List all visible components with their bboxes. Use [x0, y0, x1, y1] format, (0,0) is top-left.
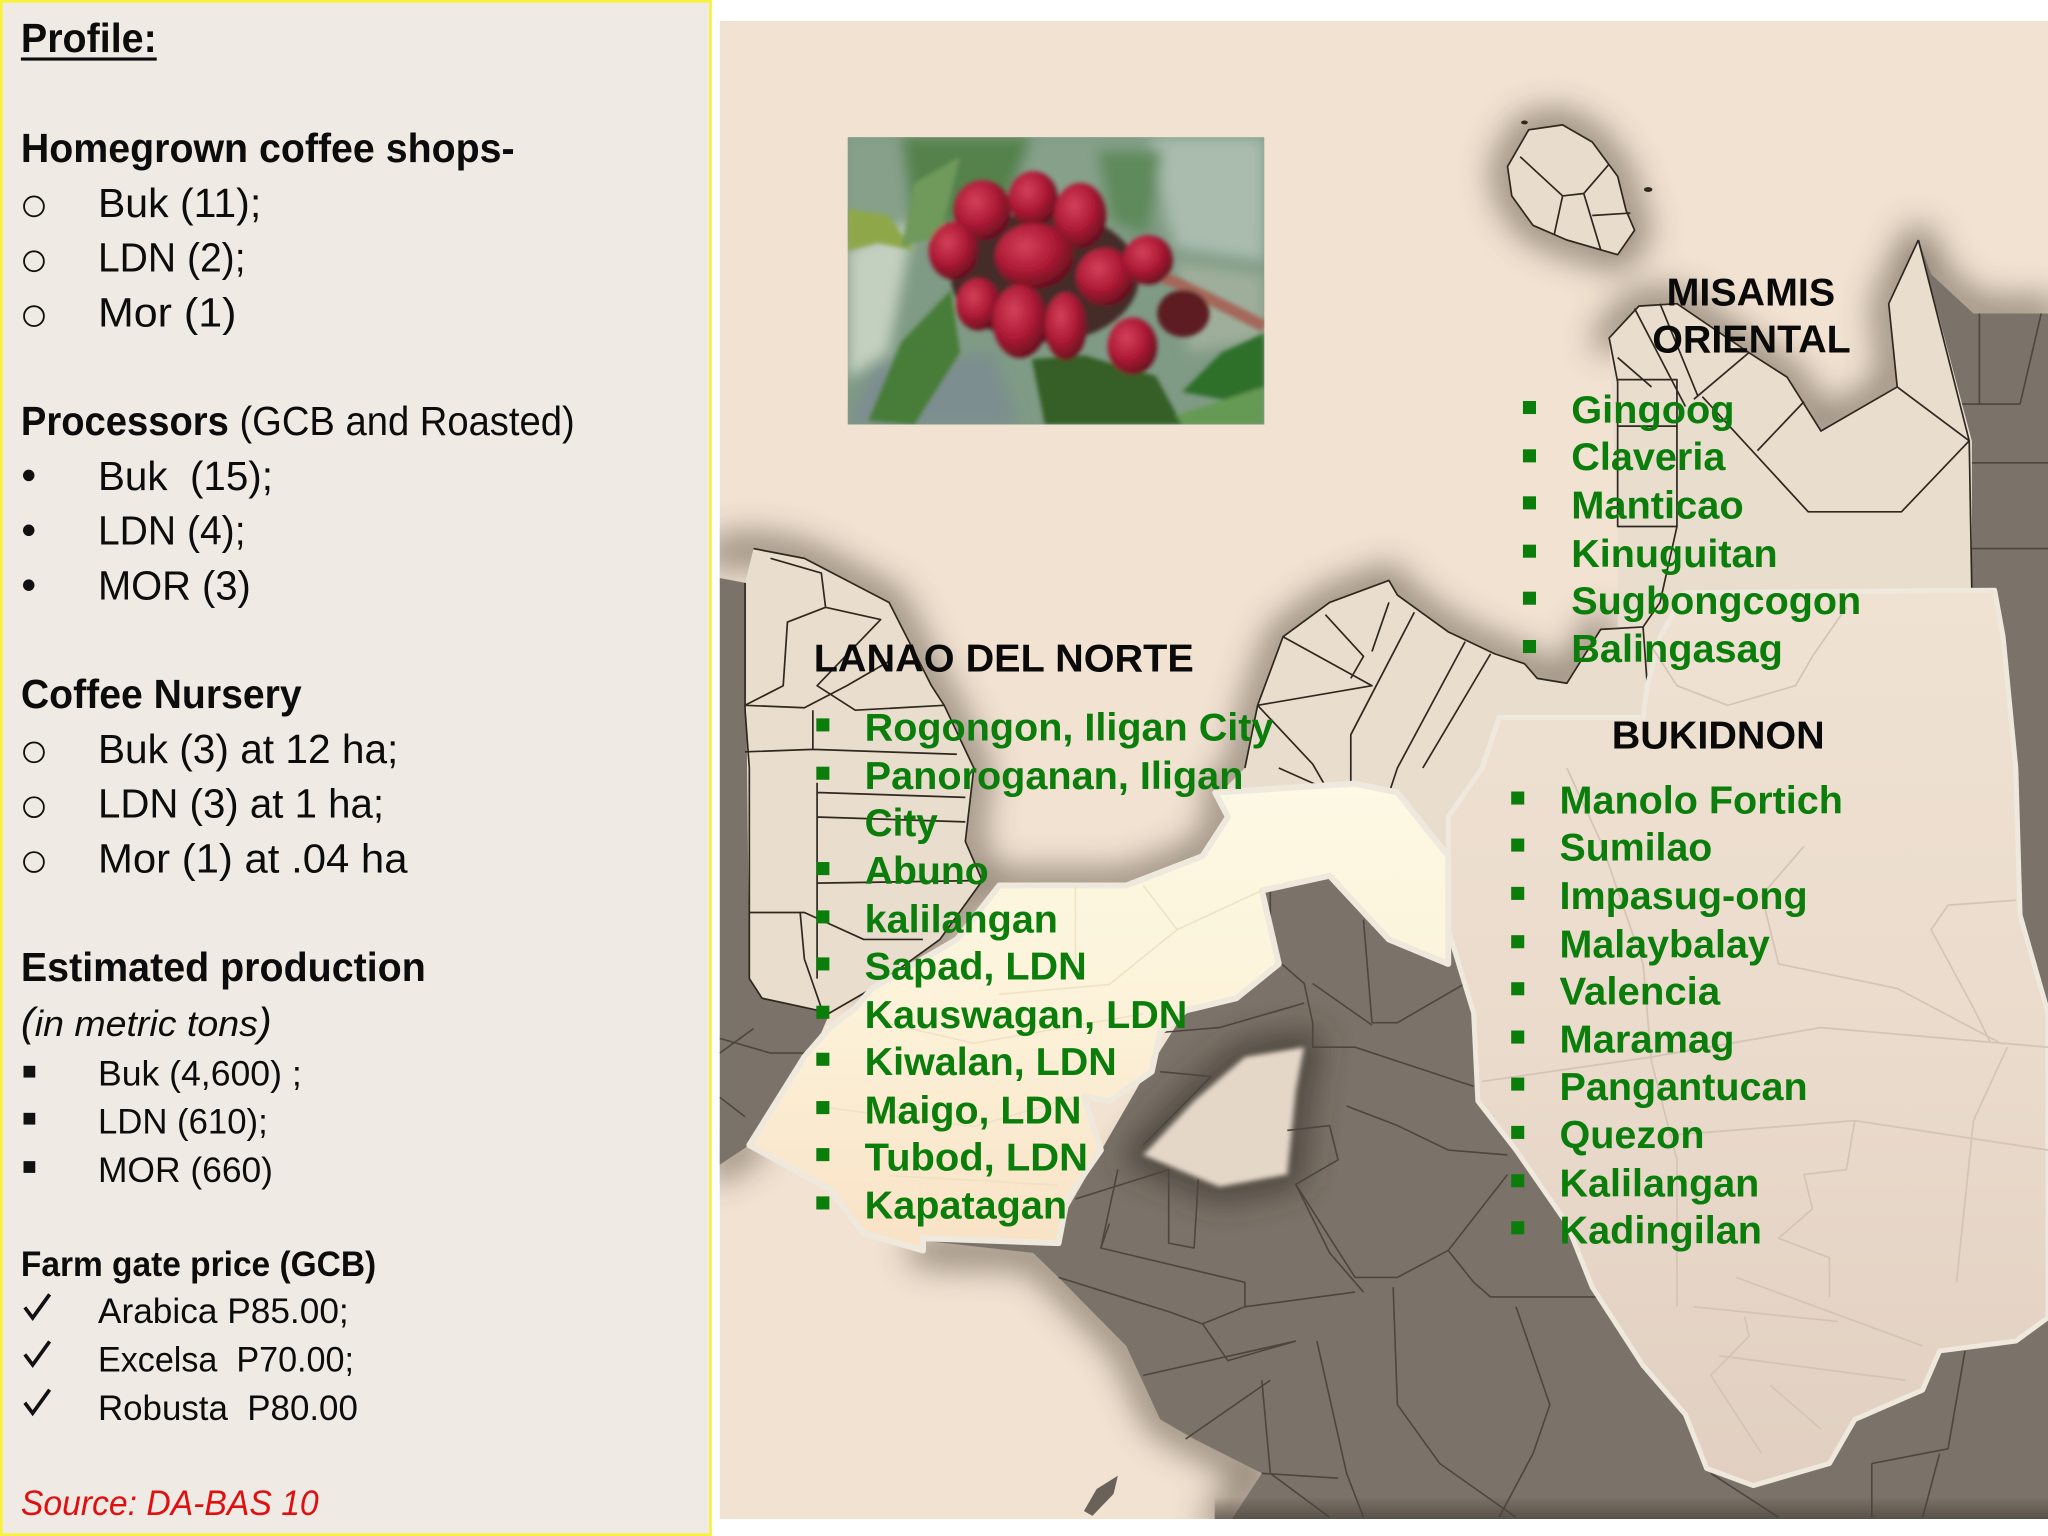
section: processors: LDN (4);: [98, 508, 246, 554]
light land: misamis oriental: [1219, 240, 1972, 882]
heading: lanao del norte: LANAO DEL NORTE: [814, 637, 1194, 680]
section: estimated production: [21, 944, 426, 1190]
list: bukidnon: Valencia: [1560, 970, 1721, 1013]
list: lanao del norte: Maigo, LDN: [865, 1089, 1081, 1132]
section: processors: Buk (15);: [98, 453, 273, 499]
section: farm gate price: Robusta P80.00: [98, 1389, 358, 1428]
source note: Source: DA-BAS 10: [21, 1484, 319, 1523]
black boundaries: misamis: [1244, 240, 1973, 788]
coast shadows: [720, 125, 2048, 1519]
section: homegrown coffee shops: Mor (1): [98, 290, 236, 336]
section: homegrown coffee shops: Homegrown coffee shops-: [21, 125, 515, 171]
list: lanao del norte: Rogongon, Iligan City: [865, 707, 1274, 750]
list: lanao del norte: Kapatagan: [865, 1185, 1067, 1228]
section: processors: [21, 398, 575, 609]
list: lanao del norte: Panoroganan, Iligan: [865, 755, 1243, 798]
heading: misamis oriental: [1652, 272, 1851, 362]
lake: [1143, 1047, 1304, 1187]
dark land boundaries: [720, 313, 2048, 1517]
section: coffee nursery: LDN (3) at 1 ha;: [98, 781, 384, 827]
list: bukidnon: Pangantucan: [1560, 1066, 1808, 1109]
section: estimated production: MOR (660): [98, 1151, 273, 1190]
list: bukidnon: Maramag: [1560, 1019, 1735, 1062]
dark neighbouring land: [923, 240, 2048, 1536]
section: estimated production: (in metric tons): [21, 999, 272, 1045]
panel: profile: [1, 1, 711, 1535]
bukidnon highlight: [1448, 590, 2048, 1486]
list: lanao del norte: Sapad, LDN: [865, 946, 1087, 989]
list: bukidnon: Kadingilan: [1560, 1209, 1762, 1252]
section: homegrown coffee shops: Buk (11);: [98, 180, 261, 226]
section: processors: Processors (GCB and Roasted): [21, 398, 575, 444]
list: lanao del norte: [814, 637, 1274, 1228]
heading: misamis oriental: ORIENTAL: [1652, 319, 1851, 362]
list: bukidnon: Malaybalay: [1560, 923, 1770, 966]
section: farm gate price: Farm gate price (GCB): [21, 1245, 376, 1284]
list: misamis oriental: Gingoog: [1571, 389, 1735, 432]
section: farm gate price: Arabica P85.00;: [98, 1292, 349, 1331]
leaves: [848, 209, 914, 251]
section: homegrown coffee shops: [21, 125, 515, 336]
section: farm gate price: Excelsa P70.00;: [98, 1340, 354, 1379]
section: coffee nursery: Buk (3) at 12 ha;: [98, 726, 398, 772]
heading: misamis oriental: MISAMIS: [1667, 272, 1835, 315]
list: misamis oriental: Manticao: [1571, 485, 1744, 528]
black boundaries: nw lanao: [745, 549, 982, 1013]
light land: nw lanao: [745, 549, 982, 1013]
list: lanao del norte: City: [865, 802, 938, 845]
list: misamis oriental: Kinuguitan: [1571, 533, 1778, 576]
branch: [1143, 268, 1264, 327]
section: processors: MOR (3): [98, 563, 251, 609]
section: homegrown coffee shops: LDN (2);: [98, 235, 246, 281]
list: bukidnon: Quezon: [1560, 1114, 1704, 1157]
list: bukidnon: Kalilangan: [1560, 1162, 1759, 1205]
section: farm gate price: [21, 1245, 376, 1428]
lanao del norte highlight: [749, 784, 1448, 1250]
dark land: left strip: [720, 578, 830, 1165]
list: misamis oriental: Sugbongcogon: [1571, 580, 1861, 623]
heading: profile: Profile:: [21, 15, 157, 61]
list: misamis oriental: [1523, 272, 1861, 671]
section: coffee nursery: [21, 671, 408, 881]
heading: bukidnon: BUKIDNON: [1612, 714, 1825, 757]
list: lanao del norte: Kauswagan, LDN: [865, 994, 1187, 1037]
list: lanao del norte: Abuno: [865, 850, 989, 893]
section: estimated production: Buk (4,600) ;: [98, 1054, 302, 1093]
list: bukidnon: Manolo Fortich: [1560, 780, 1843, 823]
list: bukidnon: [1511, 714, 1843, 1252]
section: estimated production: LDN (610);: [98, 1103, 268, 1142]
section: coffee nursery: Mor (1) at .04 ha: [98, 835, 408, 881]
dark land: small island: [1084, 1476, 1118, 1516]
photo: coffee berries: [848, 137, 1264, 424]
section: estimated production: Estimated production: [21, 944, 426, 990]
list: misamis oriental: Claveria: [1571, 436, 1727, 479]
list: bukidnon: Impasug-ong: [1560, 875, 1808, 918]
list: bukidnon: Sumilao: [1560, 827, 1712, 870]
bottom edge shading: [1215, 1497, 2048, 1519]
section: coffee nursery: Coffee Nursery: [21, 671, 302, 717]
island: camiguin: [1508, 120, 1652, 255]
list: lanao del norte: Tubod, LDN: [865, 1136, 1088, 1179]
map panel: [720, 21, 2048, 1536]
list: misamis oriental: Balingasag: [1571, 628, 1783, 671]
list: lanao del norte: kalilangan: [865, 899, 1058, 942]
list: lanao del norte: Kiwalan, LDN: [865, 1041, 1117, 1084]
